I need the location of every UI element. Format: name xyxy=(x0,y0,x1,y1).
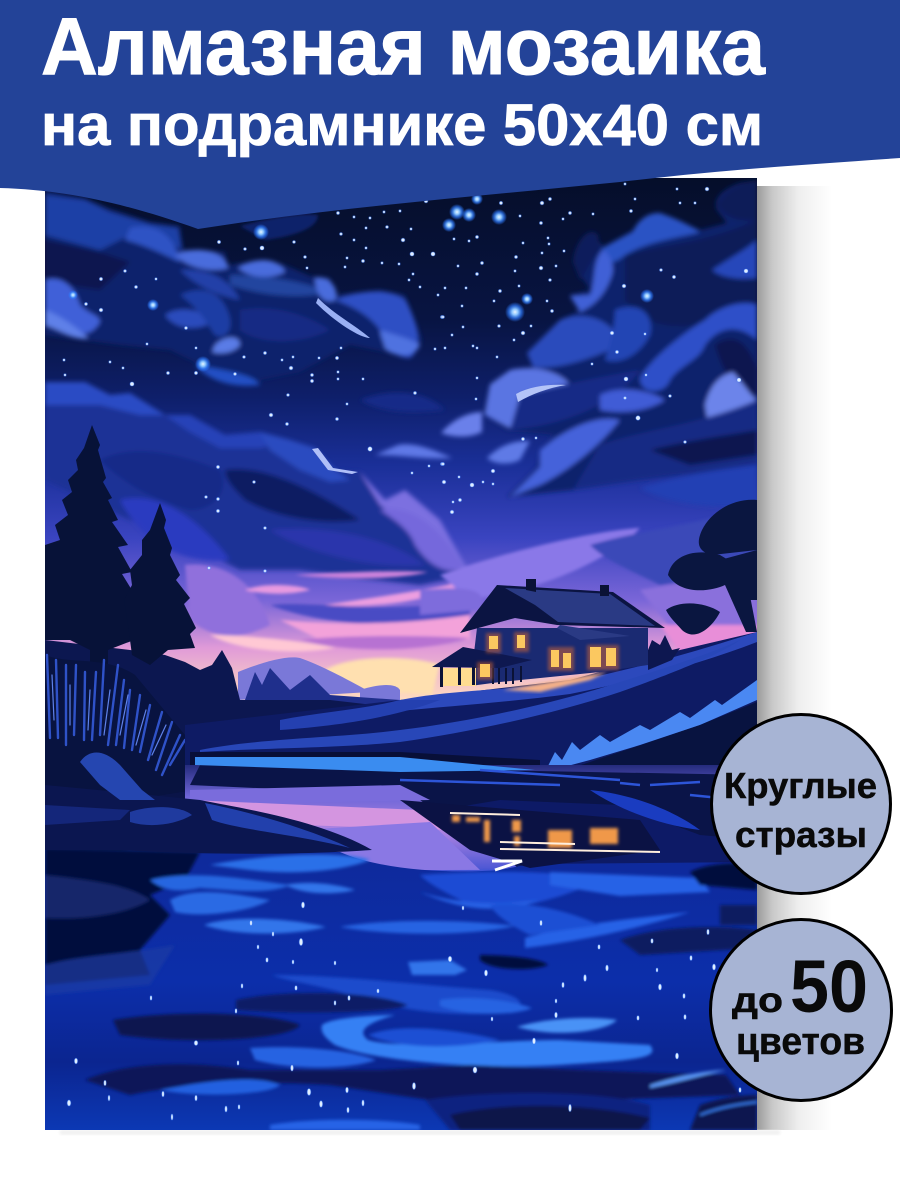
small cloud by banner xyxy=(240,214,318,240)
stars: large glowing xyxy=(68,193,654,372)
left pine trees xyxy=(45,425,196,680)
canvas shadow xyxy=(60,186,832,1135)
upper left clouds xyxy=(45,190,445,412)
cloud highlight streak xyxy=(316,298,370,338)
stars: water reflections xyxy=(67,902,741,1120)
glow behind porch xyxy=(442,668,476,686)
left grasses xyxy=(45,654,185,776)
porch posts xyxy=(440,666,522,687)
badge: round rhinestones: стразы xyxy=(735,814,867,855)
lit windows xyxy=(480,635,616,677)
painting: night landscape xyxy=(45,178,757,1130)
badge: up to 50 colours: 50 xyxy=(790,945,868,1028)
water xyxy=(45,850,757,1130)
right cloud highlight xyxy=(516,385,566,402)
house reflection in water xyxy=(400,800,660,870)
house yard light xyxy=(503,672,607,692)
right clouds xyxy=(441,180,757,507)
painting base xyxy=(62,792,185,851)
lower roof xyxy=(557,625,630,640)
badge: up to 50 colours xyxy=(710,920,892,1100)
river water xyxy=(185,757,757,875)
badge: round rhinestones xyxy=(712,714,890,894)
mid cloud pale edge xyxy=(312,448,358,474)
subtitle: на подрамнике 50х40 см xyxy=(41,93,763,158)
house xyxy=(432,579,665,692)
window glow xyxy=(477,632,619,680)
right tree xyxy=(666,500,757,635)
badge: up to 50 colours: цветов xyxy=(736,1021,865,1063)
middle cloud band xyxy=(45,382,470,585)
main roof xyxy=(460,585,665,633)
porch roof xyxy=(432,647,532,668)
badge: round rhinestones: Круглые xyxy=(724,765,877,806)
distant hills xyxy=(238,657,400,704)
chimneys xyxy=(526,579,609,596)
title: Алмазная мозаика xyxy=(41,2,766,92)
header banner xyxy=(0,0,900,229)
rocks xyxy=(45,753,372,854)
sky xyxy=(45,178,757,708)
river bank and right hillside xyxy=(185,632,757,765)
house walls xyxy=(470,628,648,686)
small right tree line xyxy=(648,635,680,670)
sunset clouds and streaks xyxy=(185,505,757,695)
tree line xyxy=(45,640,365,718)
water ripples xyxy=(45,848,757,1130)
stars: sky xyxy=(63,183,748,572)
badge: up to 50 colours: до xyxy=(732,981,783,1020)
